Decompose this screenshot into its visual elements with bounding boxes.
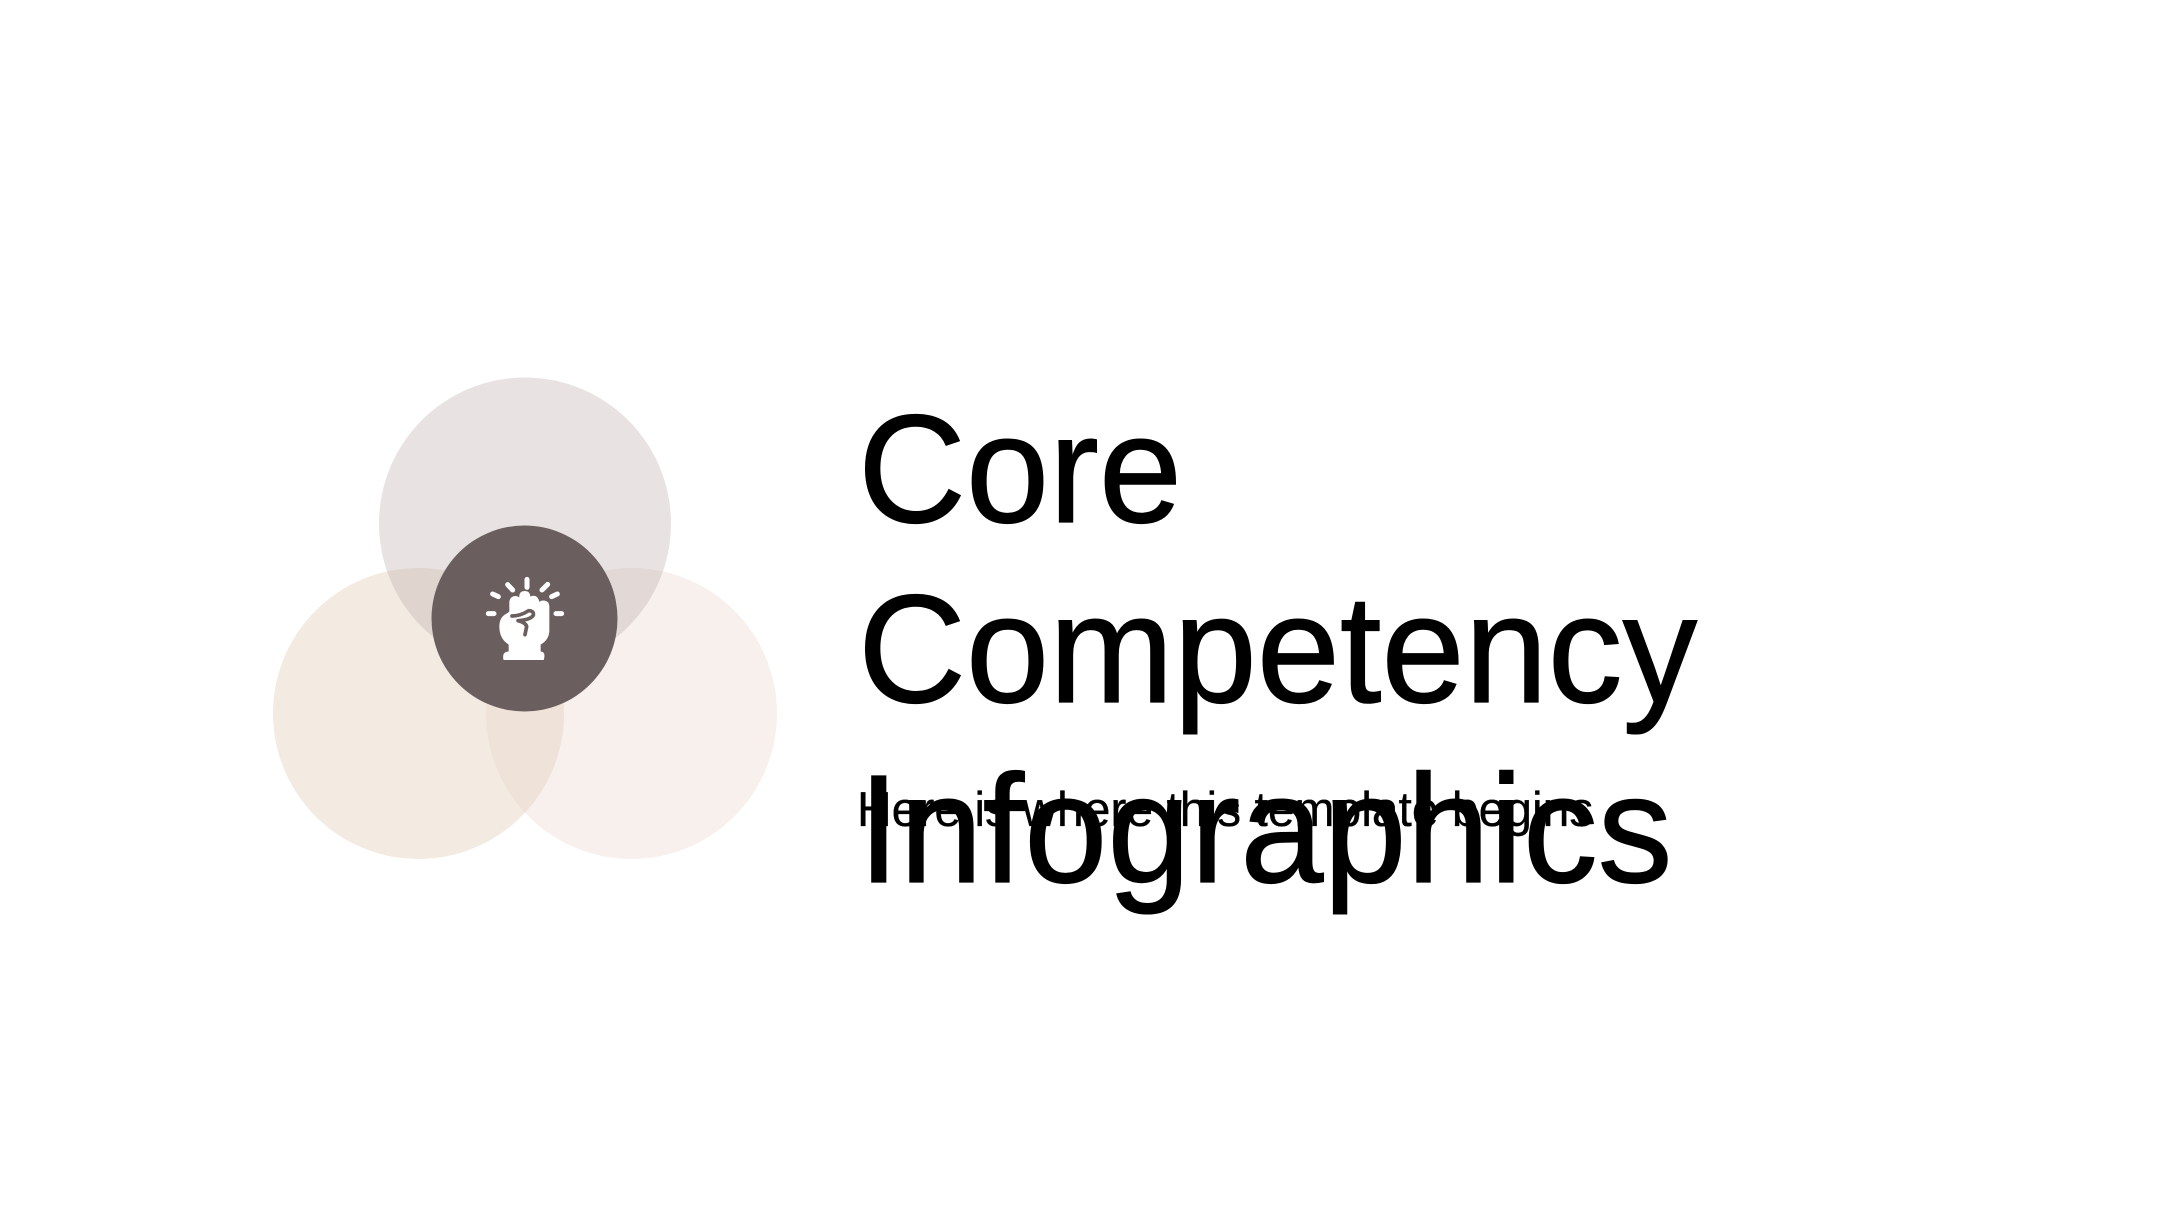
circle: top [379,378,671,670]
circle: bottom right [486,568,777,859]
title [858,383,1698,915]
subtitle: Here is where this template begins [857,783,1593,837]
title line 1: Core [858,383,1182,555]
circle: center [432,526,618,712]
title line 2: Competency [858,563,1697,735]
title line 3: Infographics [858,743,1672,915]
circle: bottom left [273,568,564,859]
icon: raised fist [488,579,562,660]
